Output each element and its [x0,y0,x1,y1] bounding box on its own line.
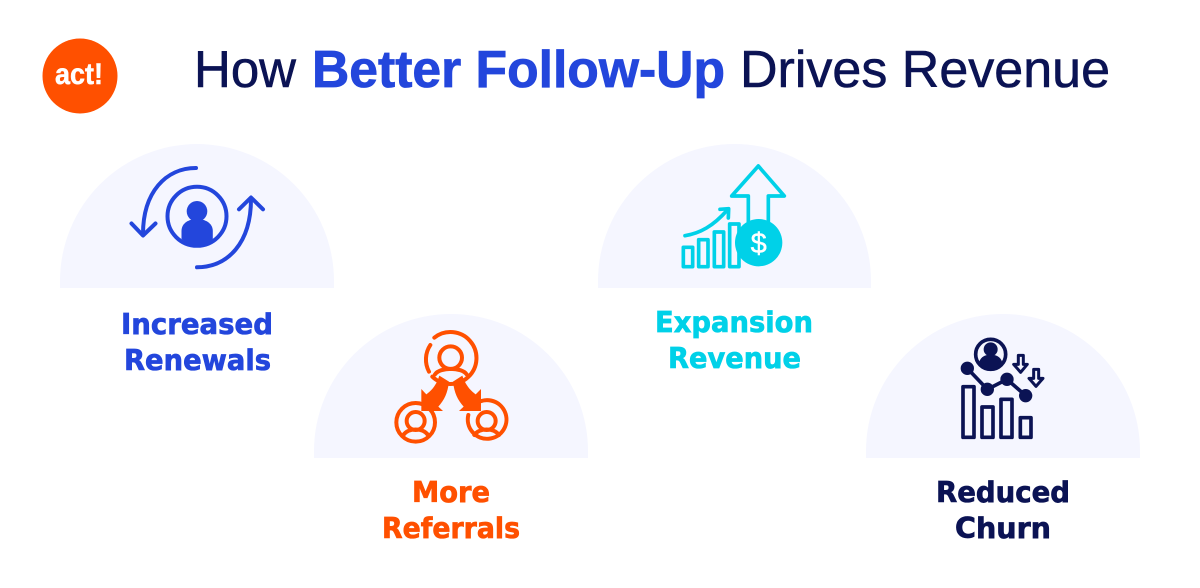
icon: growth chart with dollar coin [683,166,784,267]
label: Increased [121,308,273,341]
semicircle background [314,314,588,458]
logo: act!: act! [55,58,103,91]
title [194,41,1110,99]
semicircle background [598,144,871,288]
label: Renewals [124,344,271,377]
panel: reduced churn [866,314,1140,545]
panel: expansion revenue [598,144,871,375]
label [382,476,520,545]
semicircle background [866,314,1140,458]
icon: falling churn chart [961,339,1043,437]
label: Churn [955,512,1051,545]
logo: act! [42,38,118,114]
icon: dollar sign: $ [751,228,767,260]
label: Reduced [936,476,1070,509]
semicircle background [60,144,334,288]
label: Expansion [655,306,813,339]
label [936,476,1070,545]
panel: more referrals [314,314,588,545]
title: Drives Revenue [740,41,1110,99]
label: Revenue [668,342,801,375]
label: Referrals [382,512,520,545]
icon: person with renewal arrows [132,168,263,267]
title: Better Follow-Up [312,41,725,99]
label [121,308,273,377]
title: How [194,41,296,99]
icon: referral network [396,332,506,442]
label [655,306,813,375]
label: More [412,476,490,509]
panel: increased renewals [60,144,334,377]
